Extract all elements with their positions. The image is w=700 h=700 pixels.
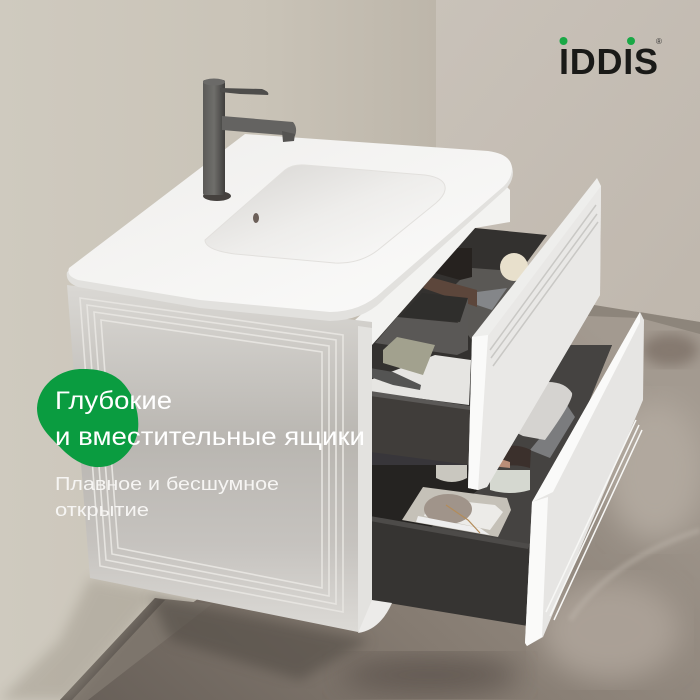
upper drawer: interior [368, 228, 547, 465]
upper drawer side wall [370, 393, 470, 465]
green blob [37, 369, 138, 467]
towel [370, 355, 471, 405]
cabinet floor shadow [150, 596, 370, 680]
sponge [500, 253, 528, 281]
logo: ® [656, 37, 662, 46]
jar behind [436, 462, 467, 482]
brush [370, 368, 421, 390]
lower drawer front [525, 312, 644, 646]
subheading: Плавное и бесшумное [55, 473, 279, 494]
lower drawer side wall [370, 517, 530, 626]
countertop [67, 134, 513, 321]
storage bin [375, 293, 468, 355]
heading [55, 387, 365, 451]
wall: left [0, 0, 436, 700]
cabinet side panel [67, 285, 392, 633]
heading: Глубокие [55, 387, 172, 415]
sink basin [205, 165, 445, 263]
dark bottle [435, 248, 472, 280]
logo: IDDIS [559, 41, 658, 82]
glass bottle [383, 337, 435, 375]
cabinet inner strip under countertop [355, 185, 510, 395]
faucet [203, 78, 296, 201]
soap tray [402, 487, 511, 537]
comb [423, 277, 477, 307]
baseboard: back wall [588, 304, 700, 334]
floor [60, 300, 700, 700]
baseboard: left wall [60, 598, 212, 700]
heading: и вместительные ящики [55, 423, 365, 451]
subheading [55, 473, 279, 520]
wall: right [435, 0, 700, 330]
upper drawer front [468, 178, 601, 490]
jar [490, 446, 531, 493]
folded towels [517, 382, 575, 458]
panel mouldings [80, 298, 343, 612]
wall shadow under cabinet [0, 578, 160, 700]
drain [253, 213, 259, 223]
lower drawer: interior [370, 345, 612, 626]
subheading: открытие [55, 499, 149, 520]
rounded cabinet foot [358, 600, 392, 633]
